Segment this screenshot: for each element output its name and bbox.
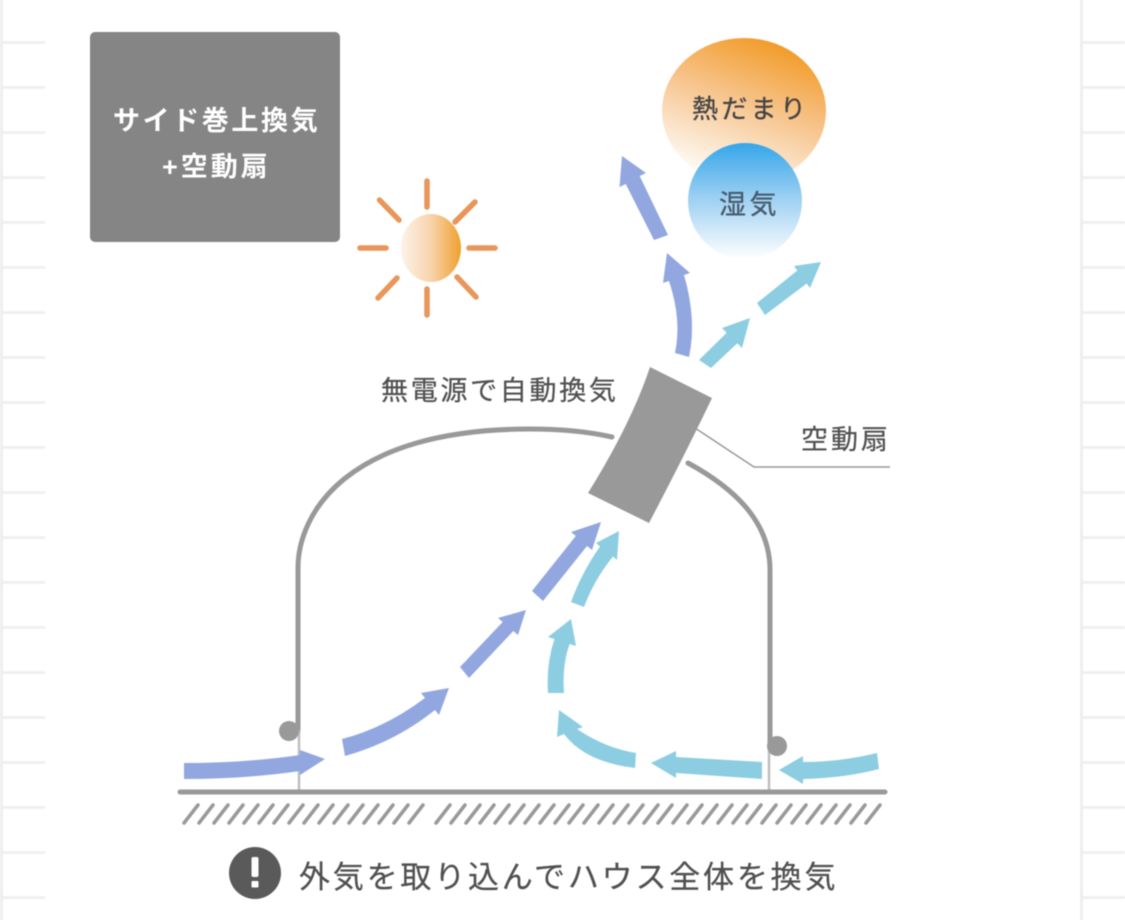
icon: exclamation [229, 847, 281, 899]
label: fan: 空動扇 [801, 425, 891, 455]
greenhouse structure [279, 429, 787, 792]
title panel: +空動扇 [162, 152, 271, 182]
air-driven fan [588, 367, 712, 523]
heat blob [662, 38, 826, 184]
title panel [90, 32, 340, 242]
blue airflow arrows [184, 156, 692, 779]
icon: sun [360, 181, 495, 315]
leader line [695, 428, 890, 467]
label: passive ventilation: 無電源で自動換気 [381, 376, 619, 406]
moisture blob: 湿気 [719, 190, 780, 220]
caption: 外気を取り込んでハウス全体を換気 [299, 860, 838, 895]
heat blob: 熱だまり [692, 94, 809, 124]
teal airflow arrows [548, 262, 879, 784]
ground [180, 792, 885, 823]
moisture blob [688, 143, 802, 259]
title panel: サイド巻上換気 [113, 106, 320, 136]
